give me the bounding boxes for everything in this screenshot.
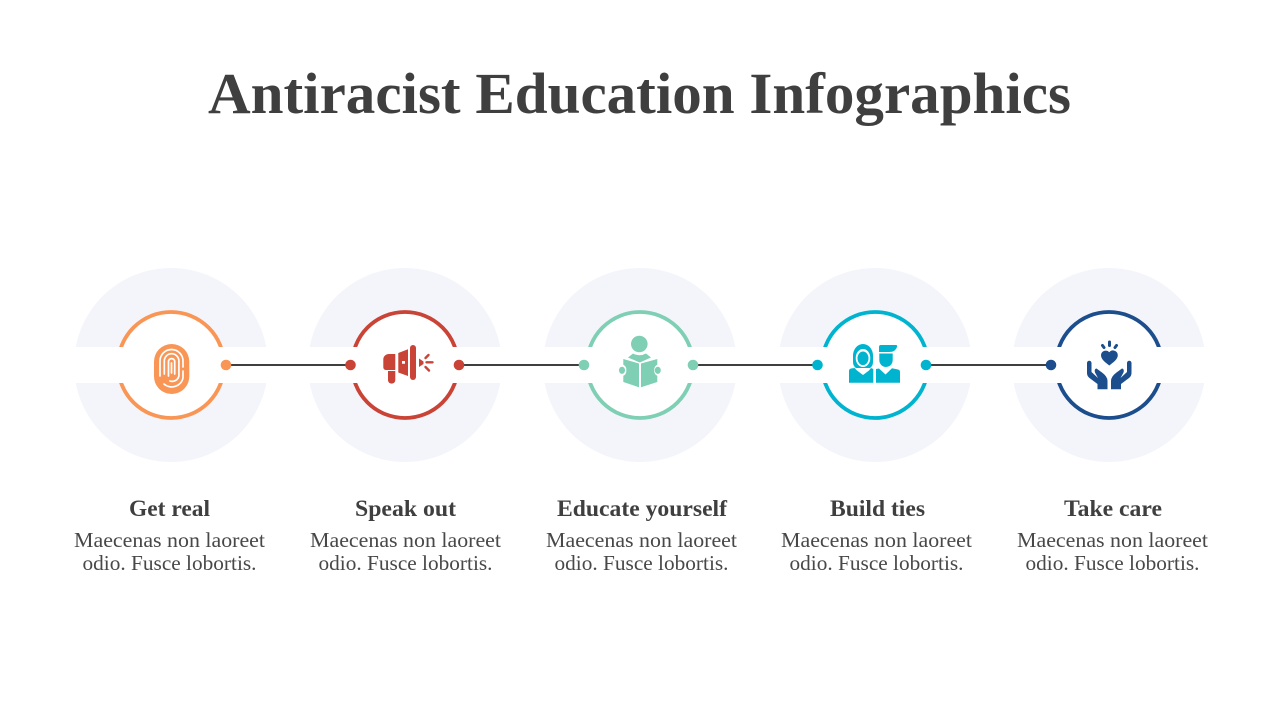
icon: two people [849,344,900,383]
icon: person reading book [619,336,661,387]
icon: megaphone [383,345,432,384]
icon rings [118,312,1162,418]
panel: Get real text [74,496,265,575]
connector dots [221,360,1056,370]
panel: Speak out text: Speak out [355,496,456,521]
panel: Take care text [1017,496,1208,575]
panel: Get real text: odio. Fusce lobortis. [82,551,256,575]
panel: Take care text: odio. Fusce lobortis. [1026,551,1200,575]
panel: Educate yourself text: Maecenas non laoreet [546,528,737,552]
panel: Build ties text: Build ties [830,496,925,521]
connector lines [226,364,1051,366]
panel: Take care text: Maecenas non laoreet [1017,528,1208,552]
icon: fingerprint [154,344,189,394]
panel: Build ties text: Maecenas non laoreet [781,528,972,552]
panel: background discs [74,268,1206,462]
panel: Get real text: Maecenas non laoreet [74,528,265,552]
panel: Build ties text [781,496,972,575]
panel: Speak out text: odio. Fusce lobortis. [318,551,492,575]
icon: hands holding heart [1087,342,1132,389]
panel: Take care text: Take care [1064,496,1162,521]
panel: Speak out text: Maecenas non laoreet [310,528,501,552]
panel: Educate yourself text [546,496,737,575]
panel: Speak out text [310,496,501,575]
panel: Educate yourself text: Educate yourself [557,496,727,521]
title: Antiracist Education Infographics [208,61,1071,126]
panel: Get real text: Get real [129,496,210,521]
panel: Build ties text: odio. Fusce lobortis. [790,551,964,575]
panel: Educate yourself text: odio. Fusce lobortis. [554,551,728,575]
